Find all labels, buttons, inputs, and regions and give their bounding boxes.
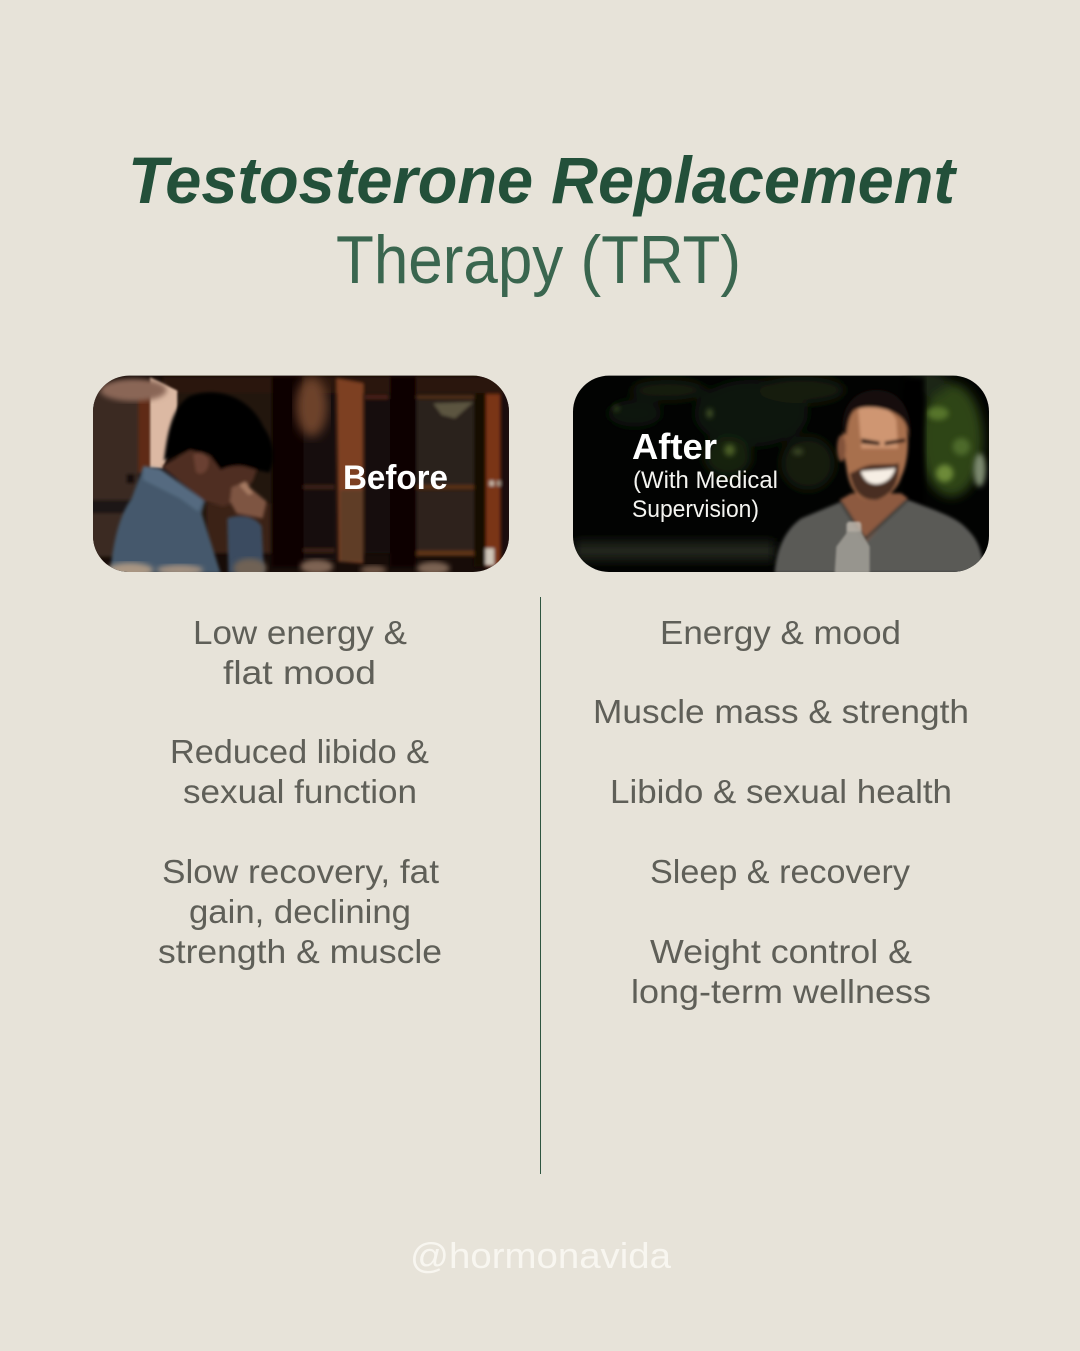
text block: before list: strength & muscle	[158, 933, 442, 970]
text block: after list	[593, 614, 969, 1010]
title: Therapy (TRT)	[336, 222, 741, 298]
title	[128, 143, 958, 298]
text block: after list: Energy & mood	[660, 614, 901, 651]
label: after: (With Medical	[633, 467, 778, 494]
man	[110, 392, 273, 573]
handle: @hormonavida	[410, 1235, 672, 1276]
text block: before list: Low energy &	[193, 614, 407, 651]
label: after	[632, 426, 778, 523]
text block: after list: long-term wellness	[631, 973, 931, 1010]
label: after: After	[632, 426, 717, 467]
text block: before list: flat mood	[223, 654, 376, 691]
label: after: Supervision)	[632, 496, 759, 523]
panel: after photo	[568, 370, 993, 580]
text block: before list: sexual function	[183, 773, 417, 810]
text block: before list: Reduced libido &	[170, 733, 429, 770]
text block: after list: Weight control &	[650, 933, 912, 970]
text block: before list: Slow recovery, fat	[162, 853, 439, 890]
divider	[540, 597, 541, 1174]
label: before: Before	[343, 459, 448, 497]
text block: after list: Sleep & recovery	[650, 853, 911, 890]
text block: after list: Muscle mass & strength	[593, 693, 969, 730]
text block: before list	[158, 614, 442, 970]
man	[775, 390, 985, 573]
text block: after list: Libido & sexual health	[610, 773, 952, 810]
text block: before list: gain, declining	[189, 893, 411, 930]
panel: before photo	[90, 370, 515, 580]
title: Testosterone Replacement	[128, 143, 958, 217]
